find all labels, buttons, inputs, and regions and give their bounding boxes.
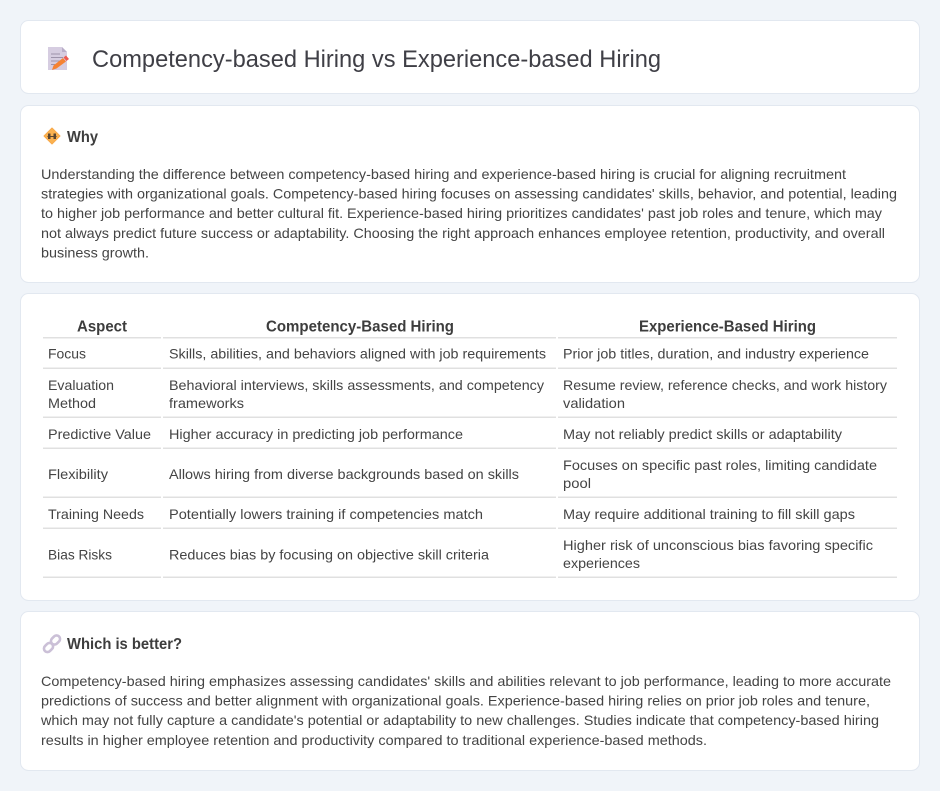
heading: which is better: Which is better?	[67, 636, 182, 653]
table row: focus	[43, 346, 897, 369]
table row: evaluation method: Behavioral interviews, skills assessments, and competency	[169, 377, 544, 393]
table row: predictive value: May not reliably predict skills or adaptability	[563, 426, 842, 442]
text block: why paragraph: not always predict future success or adaptability. Choosing the right approach enhances employee retention, productivity, and overall	[41, 225, 885, 241]
table row: evaluation method: Method	[48, 395, 96, 411]
text block: which is better paragraph: results in higher employee retention and productivity compared to traditional experience-based methods.	[41, 732, 707, 748]
table row: bias risks: Higher risk of unconscious bias favoring specific	[563, 537, 873, 553]
panel: why	[20, 106, 920, 282]
table row: evaluation method	[43, 377, 897, 418]
table header row: Competency-Based Hiring	[266, 318, 454, 336]
text block: why paragraph: strategies with organizational goals. Competency-based hiring focuses on assessing candidates' skills, behavior, and potential, leading	[41, 186, 897, 202]
table row: flexibility: pool	[563, 475, 591, 491]
table row: evaluation method: frameworks	[169, 395, 244, 411]
table row: bias risks: Bias Risks	[48, 546, 112, 562]
icon: document with pencil	[48, 47, 69, 70]
text block: which is better paragraph: predictions of success and better alignment with organizational goals. Experience-based hiring relies on prior job roles and tenure,	[41, 693, 870, 709]
text block: why paragraph: business growth.	[41, 244, 149, 260]
text block: which is better paragraph: which may not fully capture a candidate's potential or adaptability to new challenges. Studies indicate that competency-based hiring	[40, 712, 879, 728]
panel: header	[20, 20, 920, 94]
table row: flexibility: Allows hiring from diverse backgrounds based on skills	[169, 466, 519, 482]
table row: focus: Prior job titles, duration, and industry experience	[563, 346, 869, 362]
table row: evaluation method: Evaluation	[48, 377, 114, 393]
text block: why paragraph: Understanding the difference between competency-based hiring and experience-based hiring is crucial for aligning recruitment	[41, 166, 846, 182]
text block: why paragraph: to higher job performance and better cultural fit. Experience-based hiring prioritizes candidates' past job roles and tenure, which may	[41, 205, 882, 221]
table row: bias risks: experiences	[563, 555, 640, 571]
table header row: Aspect	[77, 318, 128, 336]
table row: flexibility: Flexibility	[48, 466, 108, 482]
table row: flexibility: Focuses on specific past roles, limiting candidate	[563, 457, 877, 473]
table row: flexibility	[43, 457, 897, 498]
table row: evaluation method: validation	[563, 395, 625, 411]
panel: comparison table	[20, 294, 920, 600]
heading: why: Why	[67, 129, 98, 146]
table row: training needs: Training Needs	[48, 506, 144, 522]
table row: predictive value: Predictive Value	[48, 426, 151, 442]
table header row: Experience-Based Hiring	[639, 318, 816, 336]
table row: training needs	[43, 506, 897, 529]
text block: which is better paragraph	[40, 673, 891, 748]
table row: training needs: May require additional training to fill skill gaps	[563, 506, 855, 522]
table row: focus: Focus	[48, 346, 86, 362]
icon: chain link	[42, 634, 62, 654]
table row: bias risks	[43, 537, 897, 578]
table row: predictive value: Higher accuracy in predicting job performance	[169, 426, 463, 442]
table row: bias risks: Reduces bias by focusing on objective skill criteria	[169, 546, 489, 562]
icon: orange diamond sign	[44, 128, 60, 144]
text block: which is better paragraph: Competency-based hiring emphasizes assessing candidates' skills and abilities relevant to job performance, leading to more accurate	[41, 673, 891, 689]
table header row	[43, 318, 897, 338]
text block: why paragraph	[41, 166, 897, 260]
table row: focus: Skills, abilities, and behaviors aligned with job requirements	[169, 346, 546, 362]
table row: evaluation method: Resume review, reference checks, and work history	[563, 377, 887, 393]
table row: training needs: Potentially lowers training if competencies match	[169, 506, 483, 522]
table row: predictive value	[43, 426, 897, 449]
title: Competency-based Hiring vs Experience-based Hiring	[92, 46, 661, 73]
panel: which is better	[20, 612, 920, 770]
